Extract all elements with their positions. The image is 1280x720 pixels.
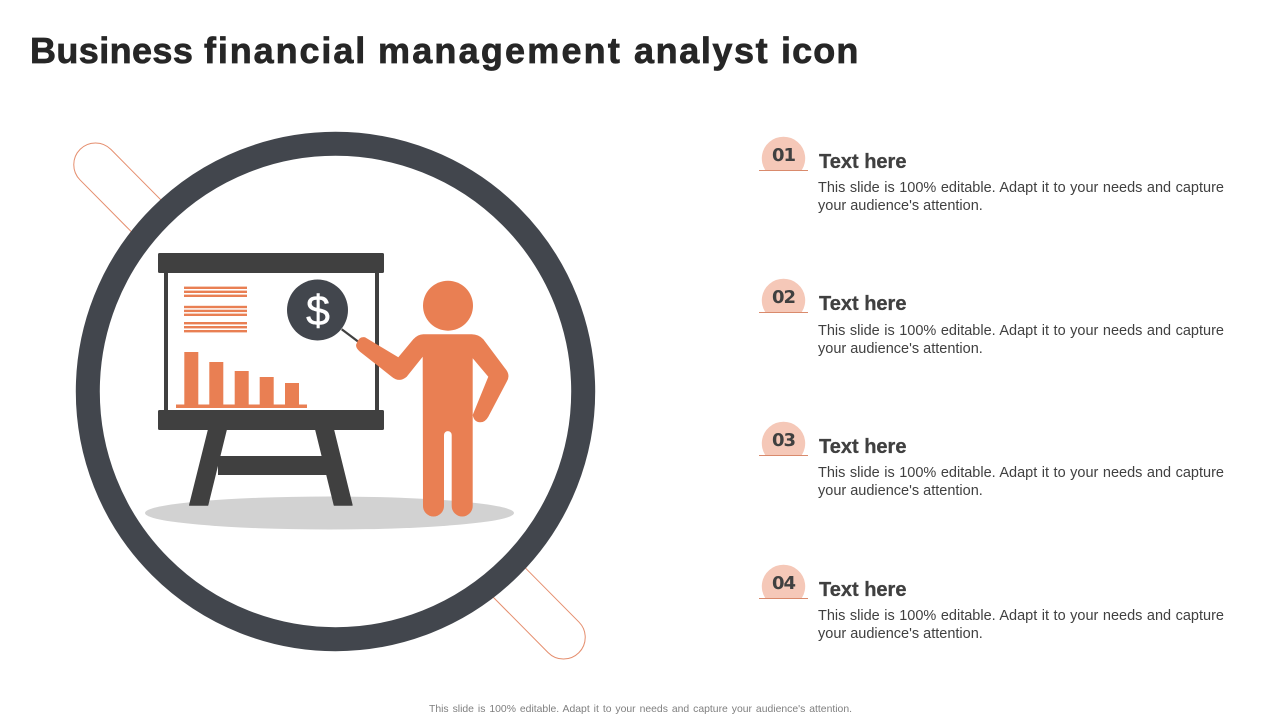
bar chart (176, 352, 307, 408)
description 03: This slide is 100% editable. Adapt it to your needs and capture (818, 465, 1224, 481)
title: icon (781, 30, 859, 71)
heading 03: Text here (819, 436, 906, 458)
badge 02 background (759, 278, 808, 313)
description 04: your audience's attention. (818, 626, 983, 642)
title: management (378, 30, 622, 71)
text lines on board (184, 287, 247, 332)
description 03 (818, 465, 1224, 499)
icon: dollar coin (287, 280, 348, 340)
heading 04: Text here (819, 579, 906, 601)
description 02 (818, 323, 1224, 357)
list item 03 (759, 422, 1224, 499)
title: analyst (634, 30, 769, 71)
description 04: This slide is 100% editable. Adapt it to your needs and capture (818, 608, 1224, 624)
footer note: This slide is 100% editable. Adapt it to your needs and capture your audience's attention. (429, 704, 852, 715)
number 01: 01 (772, 145, 795, 166)
badge 04 background (759, 564, 808, 599)
magnifier ring (88, 144, 583, 639)
badge 01 background (759, 136, 808, 171)
list item 01 (759, 136, 1224, 214)
title (30, 30, 859, 71)
person presenter (356, 281, 508, 516)
heading 02: Text here (819, 293, 906, 315)
pointer stick (342, 329, 358, 342)
description 01: This slide is 100% editable. Adapt it to your needs and capture (818, 180, 1224, 196)
description 02: This slide is 100% editable. Adapt it to your needs and capture (818, 323, 1224, 339)
heading 01: Text here (819, 151, 906, 173)
presentation board (158, 253, 384, 505)
number 04: 04 (772, 573, 795, 594)
list item 04 (759, 564, 1224, 642)
list item 02 (759, 278, 1224, 357)
ground shadow (145, 496, 514, 530)
magnifier handle capsule (65, 134, 594, 668)
description 01 (818, 180, 1224, 214)
badge 03 background (759, 422, 808, 456)
icon: dollar coin: $ (306, 287, 330, 335)
title: financial (204, 30, 367, 71)
description 01: your audience's attention. (818, 198, 983, 214)
description 03: your audience's attention. (818, 483, 983, 499)
description 04 (818, 608, 1224, 642)
number 02: 02 (772, 287, 795, 308)
description 02: your audience's attention. (818, 341, 983, 357)
magnifier illustration (73, 132, 596, 660)
title: Business (30, 30, 193, 71)
number 03: 03 (772, 430, 795, 451)
